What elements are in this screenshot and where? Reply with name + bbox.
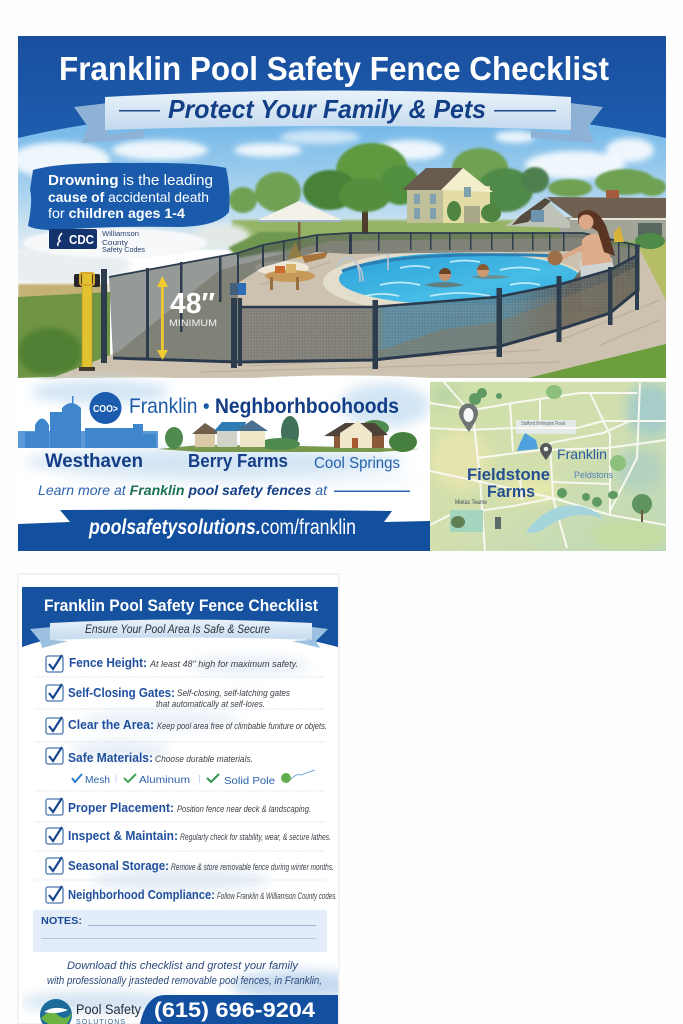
- background trees: [229, 148, 666, 213]
- source note: Safety Codes: [102, 247, 146, 254]
- item: Inspect and Maintain: [46, 827, 331, 844]
- Pool Safety Solutions logo: Pool Safety: [76, 1001, 141, 1017]
- item: Seasonal Storage: Seasonal Storage:: [68, 858, 169, 873]
- grass corner: [528, 344, 666, 378]
- panel: neighborhood map: [430, 381, 674, 553]
- item: Fence Height: [46, 655, 298, 672]
- stone patio: [52, 238, 666, 378]
- panel: checklist card: [18, 574, 370, 1024]
- ribbon banner: [74, 90, 603, 143]
- material options: Mesh: [85, 774, 110, 786]
- map label: Fieldstone Farms: Farms: [487, 482, 535, 501]
- item: Clear the Area: [46, 717, 327, 734]
- item: Proper Placement: [46, 798, 311, 815]
- item: Inspect and Maintain: Regularly check for stability, wear, & secure lathes.: [180, 832, 331, 842]
- callout: drowning statistic: cause of accidental death: [48, 189, 209, 205]
- item: Proper Placement: Position fence near deck & landscaping.: [177, 804, 311, 814]
- item: Self-Closing Gates: Self-closing, self-latching gates: [177, 688, 290, 698]
- map label: Franklin: Franklin: [557, 446, 607, 462]
- item: Proper Placement: Proper Placement:: [68, 800, 174, 815]
- left countryside: [18, 284, 108, 299]
- measuring post and ruler: [74, 273, 100, 371]
- learn more line: Learn more at Franklin pool safety fences at: [38, 482, 328, 498]
- 48 inch minimum label: 48″: [170, 288, 215, 320]
- house: yellow two-storey: [402, 168, 501, 223]
- download message: with professionally jrasteded removable pool fences, in Franklin,: [47, 975, 322, 987]
- item: Self-Closing Gates: [46, 684, 290, 709]
- checklist header band: [22, 587, 338, 647]
- URL banner: poolsafetysolutions.com/franklin: [88, 516, 356, 539]
- item: Neighborhood Compliance: [46, 886, 337, 903]
- item: Safe Materials: [46, 747, 315, 787]
- seated woman: [548, 210, 624, 297]
- city skyline: [18, 396, 158, 448]
- 48 inch minimum label: MINIMUM: [169, 318, 217, 329]
- checklist title: Franklin Pool Safety Fence Checklist: [44, 596, 318, 615]
- ladder rails: [337, 250, 388, 282]
- title: Franklin Pool Safety Fence Checklist: [59, 50, 609, 87]
- map trees and parks: [450, 385, 652, 532]
- notes box: [33, 910, 327, 952]
- back fence: [109, 232, 640, 362]
- item: Fence Height: Fence Height:: [69, 655, 147, 670]
- panel: neighborhoods: [18, 375, 432, 551]
- CDC badge: CDC: [69, 232, 95, 247]
- item: Safe Materials: Safe Materials:: [68, 750, 153, 765]
- map label: road: Stafford Mirtington Road: [521, 421, 565, 427]
- item: Neighborhood Compliance: Follow Franklin & Williamson County codes.: [217, 891, 337, 901]
- Franklin logo badge: COO>: [93, 404, 118, 415]
- checklist footer phone bar: (615) 696-9204: [154, 999, 315, 1022]
- checklist ribbon: Ensure Your Pool Area Is Safe & Secure: [85, 624, 270, 636]
- umbrella: [258, 201, 342, 252]
- neighborhood names: Cool Springs: [314, 455, 400, 472]
- neighborhood names: [45, 453, 400, 472]
- checklist ribbon: [30, 620, 328, 648]
- material options: Aluminum: [139, 774, 190, 786]
- front fence with gate: [101, 245, 639, 369]
- house: grey ranch: [505, 190, 666, 241]
- large oak tree: [303, 143, 420, 234]
- source note: [102, 231, 146, 254]
- download message: Download this checklist and grotest your family: [67, 960, 300, 972]
- neighborhoods heading: Franklin • Neghborhboohoods: [129, 395, 399, 418]
- callout: drowning statistic: for children ages 1-4: [48, 205, 185, 221]
- item: Neighborhood Compliance: Neighborhood Compliance:: [68, 887, 215, 902]
- URL banner: [18, 510, 432, 551]
- map label: Fieldstone Farms: Fieldstone: [467, 465, 550, 484]
- Franklin logo badge: [90, 392, 122, 424]
- source note: County: [102, 240, 129, 247]
- lawn: [232, 220, 672, 252]
- pool: [323, 250, 580, 306]
- download message: [47, 960, 322, 987]
- CDC badge: [49, 229, 97, 249]
- material options: [72, 770, 315, 787]
- item: Clear the Area: Keep pool area free of climbable funiture or objets.: [157, 721, 327, 731]
- swimming children: [424, 264, 510, 288]
- patio table and furniture: [230, 242, 328, 295]
- item: Self-Closing Gates: that automatically at self-loıes.: [156, 699, 265, 709]
- notes box: NOTES:: [41, 916, 82, 927]
- map label plate: [516, 420, 576, 434]
- map label: small: Mietas Teame: [455, 500, 488, 506]
- item: Clear the Area: Clear the Area:: [68, 717, 154, 732]
- ribbon subtitle: Protect Your Family & Pets: [168, 94, 486, 124]
- item: Fence Height: At least 48" high for maximum safety.: [149, 659, 298, 669]
- neighborhood houses illustration: [158, 416, 420, 452]
- map label: Fieldstone Farms: [467, 465, 550, 501]
- map roads: [430, 381, 666, 553]
- material options: Solid Pole: [224, 775, 275, 787]
- callout: drowning statistic: [23, 163, 230, 258]
- header band: [18, 36, 666, 138]
- item: Safe Materials: Choose durable materials.: [155, 754, 253, 764]
- item: Seasonal Storage: Remove & store removable fence during winter months.: [171, 862, 334, 872]
- hero scene: pool and fence: [0, 120, 672, 378]
- neighborhood names: Westhaven: [45, 451, 143, 472]
- callout: drowning statistic: Drowning is the leading: [48, 172, 213, 189]
- neighborhood names: Berry Farms: [188, 451, 288, 471]
- map label: Peldstons: Peldstons: [574, 470, 613, 481]
- checklist footer phone bar: [140, 995, 338, 1024]
- item: Self-Closing Gates: Self-Closing Gates:: [68, 685, 175, 700]
- panel: top poster: [0, 36, 674, 553]
- item: Inspect and Maintain: Inspect & Maintain:: [68, 828, 178, 843]
- map pin Franklin: [540, 443, 552, 460]
- river and water: [526, 505, 602, 533]
- Pool Safety Solutions logo: [40, 999, 141, 1024]
- height arrow: [157, 276, 168, 360]
- map pin large: [459, 404, 478, 432]
- item: Seasonal Storage: [46, 857, 334, 874]
- source note: Williamson: [102, 231, 139, 238]
